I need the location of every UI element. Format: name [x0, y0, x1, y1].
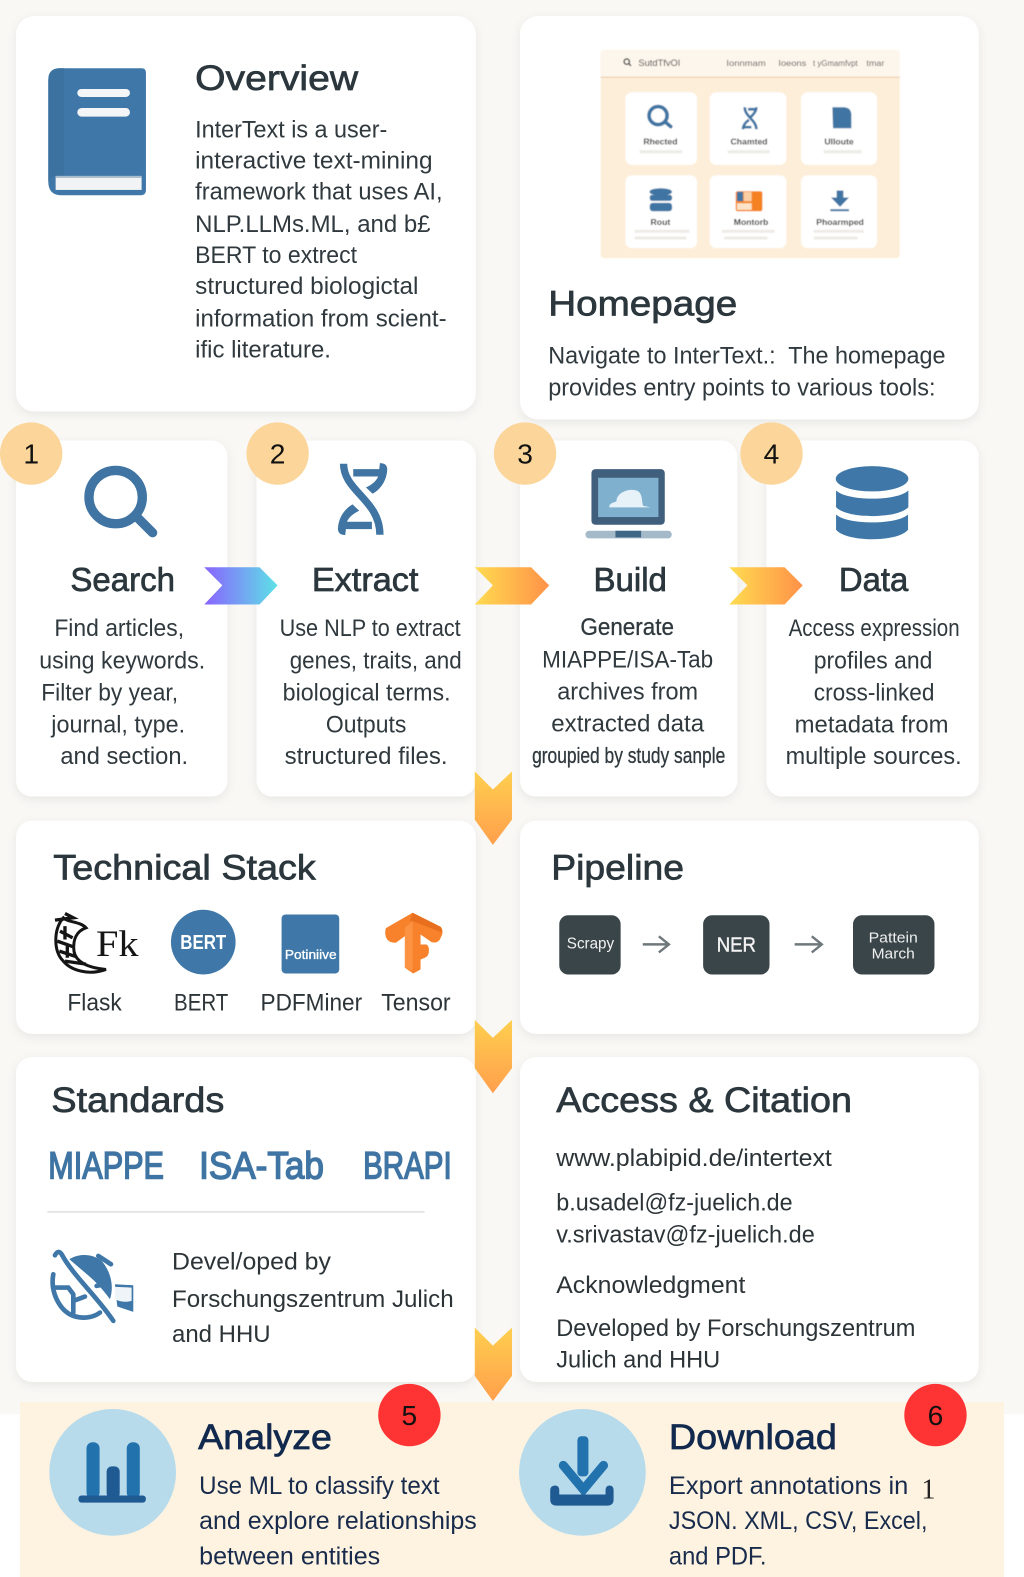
text: overview description: information from scient- [195, 305, 447, 332]
heading: homepage: Homepage [548, 284, 737, 323]
text: build description: archives from [557, 678, 698, 705]
node: pattern match: Pattein [869, 929, 918, 946]
text: overview description [195, 116, 447, 364]
panel: homepage [520, 16, 979, 419]
text: analyze description: and explore relationships [199, 1507, 477, 1535]
standards names: ISA-Tab [199, 1145, 324, 1188]
icon: BERT logo: BERT [180, 932, 226, 954]
text: homepage description: Navigate to InterText.: The homepage [548, 343, 946, 370]
arrow: search to extract [204, 567, 278, 604]
stack labels: Flask [67, 989, 123, 1016]
homepage screenshot mock: Ulloute [824, 137, 854, 147]
text: acknowledgment: Julich and HHU [556, 1346, 720, 1373]
text: data description: multiple sources. [786, 743, 962, 770]
icon: book [48, 68, 146, 195]
text: download description: Export annotations in [669, 1472, 908, 1500]
text: developed by: Devel/oped by [172, 1249, 332, 1276]
icon: BERT logo [171, 910, 236, 974]
homepage screenshot mock: Montorb [734, 217, 768, 227]
stack labels [67, 989, 451, 1016]
arrow: down 1 [475, 771, 512, 845]
text: developed by: Forschungszentrum Julich [172, 1286, 454, 1313]
icon: globe [53, 1252, 133, 1321]
heading: data: Data [839, 562, 909, 599]
text: overview description: interactive text-mining [195, 147, 433, 174]
icon: PDFMiner logo: Potiniive [285, 948, 337, 962]
text: homepage description [548, 343, 946, 402]
text: data description: metadata from [795, 712, 949, 739]
heading: overview: Overview [195, 59, 359, 98]
text: data description: Access expression [789, 615, 960, 642]
badge 1: 1 [23, 439, 39, 470]
text: url and contacts: v.srivastav@fz-juelich.de [556, 1222, 815, 1249]
panel: access and citation [520, 1057, 979, 1382]
icon: dna helix [338, 463, 387, 535]
text: data description: profiles and [814, 647, 932, 674]
badge 5: 5 [402, 1400, 417, 1431]
text: overview description: structured biologictal [195, 273, 418, 300]
badge 6 [904, 1384, 967, 1446]
text: extract description: biological terms. [283, 679, 451, 706]
text: overview description: InterText is a user- [195, 116, 387, 143]
stack labels: PDFMiner [261, 989, 362, 1016]
node: pattern match: March [872, 945, 915, 962]
heading: technical stack: Technical Stack [53, 849, 316, 888]
arrow: scrapy to NER [643, 936, 669, 952]
standards names [48, 1145, 452, 1188]
node: scrapy: Scrapy [567, 934, 614, 952]
text: build description [532, 614, 725, 768]
icon: laptop [585, 469, 672, 538]
badge 6: 6 [928, 1400, 943, 1431]
homepage screenshot mock: tmar [866, 58, 884, 68]
text: extract description: Use NLP to extract [280, 615, 461, 642]
arrow: build to data [729, 567, 803, 604]
text: homepage description: provides entry points to various tools: [548, 375, 935, 402]
standards names: MIAPPE [48, 1145, 164, 1188]
badge 1 [0, 422, 62, 485]
text: download description [669, 1472, 927, 1570]
node: NER [703, 915, 770, 975]
heading: standards: Standards [51, 1081, 224, 1120]
heading: search: Search [70, 562, 175, 599]
text: developed by: and HHU [172, 1321, 271, 1348]
stack labels: Tensor [381, 989, 451, 1016]
icon: database [836, 466, 908, 539]
text: download description: and PDF. [669, 1542, 766, 1570]
icon: TensorFlow logo [385, 913, 443, 973]
heading: pipeline: Pipeline [551, 849, 684, 888]
icon: PDFMiner logo [282, 914, 339, 973]
icon: flask logo [55, 913, 139, 972]
arrow: down 2 [475, 1020, 512, 1093]
analyze section [49, 1409, 477, 1570]
text: search description: Find articles, [54, 615, 184, 642]
heading: build: Build [593, 562, 667, 599]
text: overview description: NLP.LLMs.ML, and b£ [195, 211, 431, 238]
text: build description: MIAPPE/ISA-Tab [542, 646, 713, 673]
stray numeral: 1 [921, 1475, 935, 1506]
panel: step 4 data [766, 441, 979, 797]
homepage screenshot mock: t yGmamfvpt [813, 58, 858, 68]
text: data description [786, 615, 962, 770]
text: analyze description: between entities [199, 1542, 380, 1570]
badge 5 [378, 1384, 441, 1446]
arrow: NER to pattern match [795, 936, 822, 952]
text: acknowledgment [556, 1272, 915, 1373]
icon: bar chart [49, 1409, 176, 1536]
text: search description: Filter by year, [41, 679, 178, 706]
text: analyze description [199, 1472, 477, 1570]
node: pattern match [853, 915, 934, 975]
badge 4: 4 [764, 439, 779, 470]
panel: step 1 search [16, 441, 227, 797]
standards names: BRAPI [363, 1145, 452, 1188]
text: build description: groupied by study sanple [532, 743, 725, 768]
panel: standards [16, 1057, 476, 1382]
arrow: extract to build [475, 567, 549, 604]
homepage screenshot mock: Rout [651, 217, 670, 227]
text: search description: journal, type. [50, 712, 185, 739]
download section [519, 1409, 935, 1570]
text: overview description: ific literature. [195, 337, 331, 364]
text: build description: Generate [580, 614, 674, 641]
homepage screenshot mock: Rhected [643, 137, 677, 147]
icon: download [519, 1409, 646, 1536]
text: overview description: BERT to extrect [195, 242, 357, 269]
panel: step 3 build [520, 441, 737, 797]
badge 4 [740, 422, 803, 485]
stack labels: BERT [174, 989, 229, 1016]
text: url and contacts: www.plabipid.de/intertext [555, 1145, 832, 1172]
homepage screenshot mock: Ioeons [778, 58, 807, 68]
homepage screenshot mock: Ionnmam [726, 58, 766, 68]
text: build description: extracted data [551, 711, 705, 738]
text: analyze description: Use ML to classify text [199, 1472, 440, 1500]
text: data description: cross-linked [814, 679, 934, 706]
heading: access and citation: Access & Citation [556, 1081, 852, 1120]
icon: magnifier [89, 470, 153, 533]
homepage screenshot mock: SutdTfvOI [638, 58, 680, 68]
icon: flask logo: Fk [96, 924, 139, 965]
text: acknowledgment: Developed by Forschungszentrum [556, 1315, 915, 1342]
panel: pipeline [520, 821, 979, 1034]
node: NER: NER [717, 934, 756, 956]
heading: analyze: Analyze [198, 1418, 332, 1457]
text: developed by [172, 1249, 454, 1348]
text: overview description: framework that uses AI, [195, 179, 443, 206]
heading: download: Download [669, 1418, 837, 1457]
heading: extract: Extract [312, 562, 418, 599]
text: search description [39, 615, 205, 770]
text: extract description [280, 615, 462, 770]
panel: step 2 extract [257, 441, 476, 797]
homepage screenshot mock: Chamted [731, 137, 768, 147]
text: extract description: genes, traits, and [290, 647, 462, 674]
text: url and contacts: b.usadel@fz-juelich.de [556, 1189, 793, 1216]
panel: bottom band [20, 1402, 1004, 1577]
text: extract description: Outputs [326, 712, 406, 739]
badge 3 [494, 422, 556, 485]
text: search description: and section. [60, 743, 188, 770]
badge 2 [246, 422, 309, 485]
arrow: down 3 [475, 1328, 512, 1401]
homepage screenshot mock: Phoarmped [816, 217, 864, 227]
text: acknowledgment: Acknowledgment [556, 1272, 746, 1299]
text: search description: using keywords. [39, 647, 205, 674]
text: url and contacts [555, 1145, 832, 1249]
badge 3: 3 [517, 439, 533, 470]
panel: overview [16, 16, 476, 411]
node: scrapy [559, 915, 621, 975]
panel: technical stack [16, 821, 476, 1034]
text: extract description: structured files. [285, 743, 448, 770]
text: download description: JSON. XML, CSV, Excel, [669, 1507, 927, 1535]
badge 2: 2 [270, 439, 285, 470]
homepage screenshot mock [601, 50, 900, 258]
